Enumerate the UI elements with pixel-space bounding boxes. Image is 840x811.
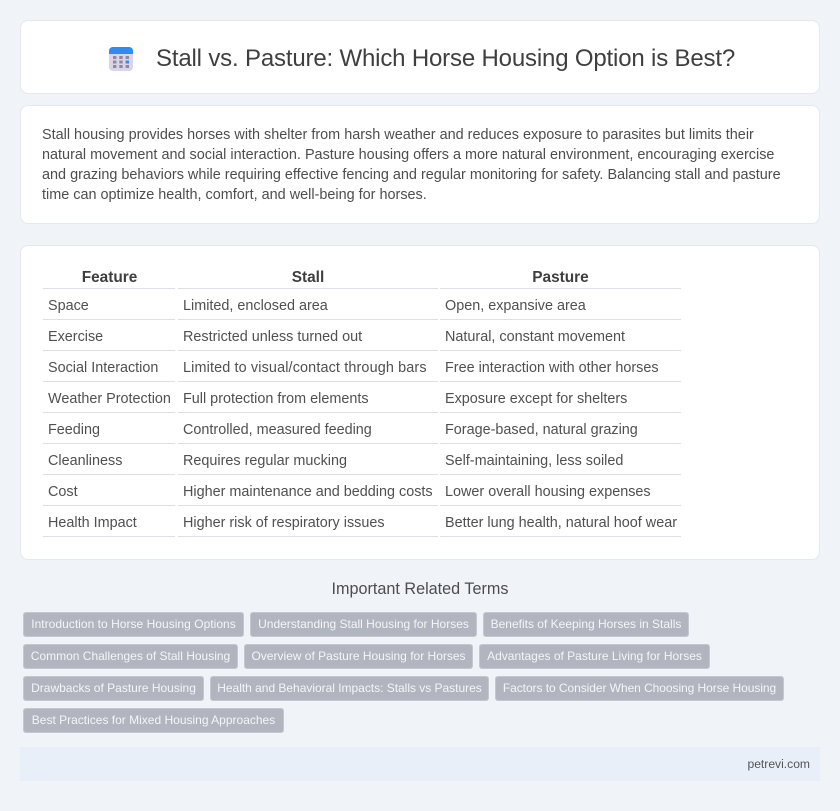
row: health impact: Higher risk of respiratory issues <box>183 515 385 531</box>
row: cost <box>48 484 651 500</box>
row: health impact: Health Impact <box>48 515 137 531</box>
heading: related terms: Important Related Terms <box>332 580 508 598</box>
related terms tags: Drawbacks of Pasture Housing <box>31 681 196 695</box>
row: space <box>48 298 586 314</box>
row: exercise: Natural, constant movement <box>445 329 625 345</box>
text block: introduction <box>42 127 781 203</box>
related terms tags: Advantages of Pasture Living for Horses <box>487 649 702 663</box>
row: social interaction: Limited to visual/contact through bars <box>183 360 427 376</box>
row: exercise: Restricted unless turned out <box>183 329 362 345</box>
footer source: petrevi.com <box>747 757 810 771</box>
row: health impact <box>48 515 677 531</box>
row: exercise <box>48 329 625 345</box>
row: social interaction: Social Interaction <box>48 360 158 376</box>
comparison table <box>43 269 681 537</box>
row: feeding: Controlled, measured feeding <box>183 422 372 438</box>
row: exercise: Exercise <box>48 329 103 345</box>
icon: calendar <box>109 47 133 71</box>
panel: comparison table <box>20 245 820 560</box>
panel: title header <box>20 20 820 94</box>
row: cost: Higher maintenance and bedding costs <box>183 484 433 500</box>
row: space: Open, expansive area <box>445 298 586 314</box>
text block: introduction: Stall housing provides horses with shelter from harsh weather and reduces exposure to parasites but limits their <box>42 127 754 143</box>
row: feeding <box>48 422 638 438</box>
footer <box>20 747 820 781</box>
row: feeding: Feeding <box>48 422 100 438</box>
related terms tags: Introduction to Horse Housing Options <box>31 617 236 631</box>
related terms tags: Understanding Stall Housing for Horses <box>258 617 469 631</box>
table header: Stall <box>292 269 324 286</box>
title: Stall vs. Pasture: Which Horse Housing Option is Best? <box>156 45 735 72</box>
row: health impact: Better lung health, natural hoof wear <box>445 515 677 531</box>
table header: Feature <box>82 269 137 286</box>
row: cost: Cost <box>48 484 78 500</box>
row: cleanliness: Self-maintaining, less soiled <box>445 453 623 469</box>
row: cleanliness: Requires regular mucking <box>183 453 347 469</box>
row: cleanliness: Cleanliness <box>48 453 122 469</box>
text block: introduction: and grazing behaviors while requiring effective fencing and regular monitoring for safety. Balancing stall and pasture <box>42 167 781 183</box>
row: social interaction <box>48 360 659 376</box>
related terms tags: Overview of Pasture Housing for Horses <box>251 649 466 663</box>
row: weather protection: Full protection from elements <box>183 391 369 407</box>
row: space: Limited, enclosed area <box>183 298 328 314</box>
text block: introduction: natural movement and social interaction. Pasture housing offers a more natural environment, encouraging exercise <box>42 147 774 163</box>
row: weather protection <box>48 391 627 407</box>
row: feeding: Forage-based, natural grazing <box>445 422 638 438</box>
related terms tags: Common Challenges of Stall Housing <box>31 649 230 663</box>
row: cleanliness <box>48 453 623 469</box>
related terms tags: Best Practices for Mixed Housing Approaches <box>32 713 275 727</box>
row: weather protection: Weather Protection <box>48 391 171 407</box>
text block: introduction: time can optimize health, comfort, and well-being for horses. <box>42 187 427 203</box>
row: space: Space <box>48 298 89 314</box>
related terms tags: Benefits of Keeping Horses in Stalls <box>491 617 681 631</box>
table header <box>82 269 589 286</box>
table header: Pasture <box>532 269 589 286</box>
row: social interaction: Free interaction with other horses <box>445 360 659 376</box>
related terms tags: Health and Behavioral Impacts: Stalls vs Pastures <box>217 681 482 695</box>
row: cost: Lower overall housing expenses <box>445 484 651 500</box>
related terms tags <box>23 612 784 733</box>
row: weather protection: Exposure except for shelters <box>445 391 627 407</box>
related terms tags: Factors to Consider When Choosing Horse Housing <box>503 681 776 695</box>
panel: introduction <box>20 105 820 224</box>
